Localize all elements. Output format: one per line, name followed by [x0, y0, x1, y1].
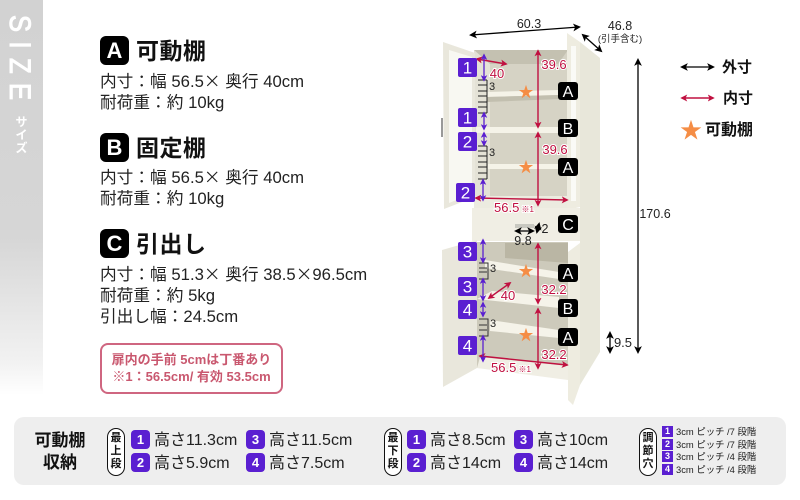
- bottom item 4: [514, 453, 533, 472]
- inner dimension labels: 39.6: [542, 142, 568, 157]
- spec C: 耐荷重：約 5kg: [100, 286, 215, 305]
- letter tags: [558, 82, 578, 347]
- pitch 1: [662, 426, 673, 437]
- legend: inner label: 内寸: [723, 90, 753, 107]
- adjustment pitch list: 3cm ピッチ /4 段階: [676, 451, 756, 462]
- band subheading: サイズ: [15, 115, 28, 155]
- panel: shelf storage: [14, 417, 786, 485]
- spec A: [100, 68, 304, 112]
- bottom item 1: [407, 430, 426, 449]
- pitch 4: 4: [665, 464, 670, 474]
- pitch 1: 1: [665, 426, 670, 436]
- stars: ★: [518, 159, 534, 176]
- outer dimension labels: 46.8: [608, 19, 632, 33]
- legend star: ★: [680, 118, 702, 143]
- top tier pill: [107, 428, 125, 476]
- inner dimension labels: 39.6: [541, 57, 567, 72]
- pitch number tags: 3: [463, 278, 472, 296]
- cabinet illustration: [441, 33, 600, 405]
- pitch number tags: 4: [463, 336, 472, 356]
- pitch number tags: 2: [461, 184, 470, 202]
- pitch arrows: [483, 55, 484, 361]
- pitch 4: [662, 464, 673, 475]
- top tier pill: 上: [110, 445, 122, 457]
- bottom item 1: 1: [413, 432, 420, 447]
- badge C: C: [107, 231, 122, 256]
- adjustment pitch list: 3cm ピッチ /7 段階: [676, 439, 756, 450]
- heading A: 可動棚: [136, 38, 206, 64]
- outer dimension labels: 3: [490, 263, 496, 275]
- section B: fixed shelf: [100, 133, 304, 208]
- badge B: B: [107, 135, 122, 160]
- bottom item 4: 4: [520, 455, 527, 470]
- outer dimension labels: 3: [490, 318, 496, 330]
- section C: drawer: [100, 229, 367, 326]
- top item 1: 1: [137, 432, 144, 447]
- callout: door note: [100, 343, 283, 394]
- top tier pill: 最: [110, 432, 122, 444]
- bottom item 3: [514, 430, 533, 449]
- adjustment pitch list: [662, 426, 756, 475]
- inner dimension labels: [490, 57, 568, 375]
- badge B: [100, 133, 129, 162]
- top item 2: [131, 453, 150, 472]
- top item 3: 3: [252, 432, 259, 447]
- legend: outer label: 外寸: [722, 59, 752, 76]
- letter tags: A: [563, 160, 574, 177]
- pitch 2: 2: [665, 439, 670, 449]
- outer dimension arrows: [471, 27, 713, 352]
- bottom tier heights: 高さ10cm: [537, 432, 608, 449]
- adjustment holes pill: [639, 428, 657, 476]
- top tier heights: 高さ11.5cm: [269, 432, 352, 449]
- stars: ★: [518, 84, 534, 101]
- top item 4: [246, 453, 265, 472]
- pitch number tags: 4: [463, 300, 472, 320]
- side band: SIZE: [0, 0, 43, 395]
- stars: ★: [518, 263, 534, 280]
- pitch number tags: [456, 58, 477, 356]
- outer dimension labels: [489, 17, 671, 350]
- bottom tier heights: 高さ8.5cm: [430, 432, 506, 449]
- badge C: [100, 229, 129, 258]
- adjustment holes pill: 節: [642, 445, 654, 457]
- panel heading: 収納: [43, 453, 77, 472]
- top item 4: 4: [252, 455, 259, 470]
- letter tags: B: [563, 121, 573, 138]
- bottom item 2: [407, 453, 426, 472]
- pitch number tags: 1: [463, 58, 472, 78]
- heading C: 引出し: [136, 231, 206, 257]
- bottom tier pill: [384, 428, 402, 476]
- pitch 3: [662, 451, 673, 462]
- letter tags: A: [563, 266, 574, 283]
- outer dimension labels: 9.5: [614, 335, 632, 350]
- spec C: [100, 261, 367, 326]
- top tier heights: 高さ7.5cm: [269, 455, 345, 472]
- top tier heights: 高さ5.9cm: [154, 455, 230, 472]
- inner dimension labels: 56.5 ※1: [491, 360, 532, 375]
- outer dimension labels: 3: [489, 81, 495, 93]
- heading B: 固定棚: [136, 135, 206, 161]
- band heading SIZE: SIZE: [4, 15, 37, 100]
- spec B: [100, 164, 304, 208]
- bottom item 3: 3: [520, 432, 527, 447]
- top tier pill: 段: [110, 458, 122, 470]
- letter tags: A: [563, 84, 574, 101]
- inner dimension arrows: [476, 51, 713, 368]
- bottom tier pill: 下: [388, 445, 398, 457]
- letter tags: C: [562, 217, 574, 234]
- inner dimension labels: 56.5 ※1: [494, 200, 535, 215]
- inner dimension labels: 32.2: [541, 347, 567, 362]
- adjustment pitch list: 3cm ピッチ /4 段階: [676, 464, 756, 475]
- bottom tier heights: 高さ14cm: [430, 455, 501, 472]
- top item 2: 2: [137, 455, 144, 470]
- stars: ★: [518, 327, 534, 344]
- bottom tier heights: 高さ14cm: [537, 455, 608, 472]
- letter tags: B: [563, 301, 573, 318]
- spec B: 耐荷重：約 10kg: [100, 189, 224, 208]
- bottom item 2: 2: [413, 455, 420, 470]
- inner dimension labels: 40: [490, 66, 504, 81]
- bottom tier heights: [407, 430, 608, 472]
- callout: door note: ※1：56.5cm/ 有効 53.5cm: [112, 369, 271, 384]
- pitch number tags: 2: [463, 132, 472, 152]
- inner dimension labels: 40: [501, 288, 515, 303]
- spec B: 内寸：幅 56.5× 奥行 40cm: [100, 164, 304, 188]
- adjustment holes pill: 穴: [642, 458, 654, 470]
- badge A: A: [107, 38, 122, 63]
- inner dimension labels: 32.2: [541, 282, 567, 297]
- spec C: 内寸：幅 51.3× 奥行 38.5×96.5cm: [100, 261, 367, 285]
- section A: movable shelf: [100, 36, 304, 112]
- bottom tier pill: 段: [388, 458, 398, 470]
- pitch 3: 3: [665, 451, 670, 461]
- legend: movable label: 可動棚: [705, 122, 753, 139]
- panel heading: [34, 431, 86, 472]
- outer dimension labels: 2: [542, 222, 549, 236]
- top tier heights: [131, 430, 352, 472]
- outer dimension labels: (引手含む): [598, 33, 642, 45]
- pitch number tags: 3: [463, 242, 472, 262]
- stars: [518, 84, 534, 344]
- adjustment pitch list: 3cm ピッチ /7 段階: [676, 426, 756, 437]
- top item 3: [246, 430, 265, 449]
- outer dimension labels: 170.6: [639, 207, 671, 221]
- top item 1: [131, 430, 150, 449]
- adjustment holes pill: 調: [642, 432, 654, 444]
- outer dimension labels: 9.8: [514, 234, 532, 248]
- spec A: 耐荷重：約 10kg: [100, 93, 224, 112]
- top tier heights: 高さ11.3cm: [154, 432, 237, 449]
- spec C: 引出し幅：24.5cm: [100, 307, 238, 326]
- panel heading: 可動棚: [34, 431, 86, 450]
- outer dimension labels: 3: [489, 147, 495, 159]
- badge A: [100, 36, 129, 65]
- bottom tier pill: 最: [388, 432, 398, 444]
- spec A: 内寸：幅 56.5× 奥行 40cm: [100, 68, 304, 92]
- outer dimension labels: 60.3: [517, 17, 541, 31]
- callout: door note: 扉内の手前 5cmは丁番あり: [112, 352, 271, 367]
- pitch number tags: 1: [463, 108, 472, 128]
- pitch 2: [662, 439, 673, 450]
- letter tags: A: [563, 330, 574, 347]
